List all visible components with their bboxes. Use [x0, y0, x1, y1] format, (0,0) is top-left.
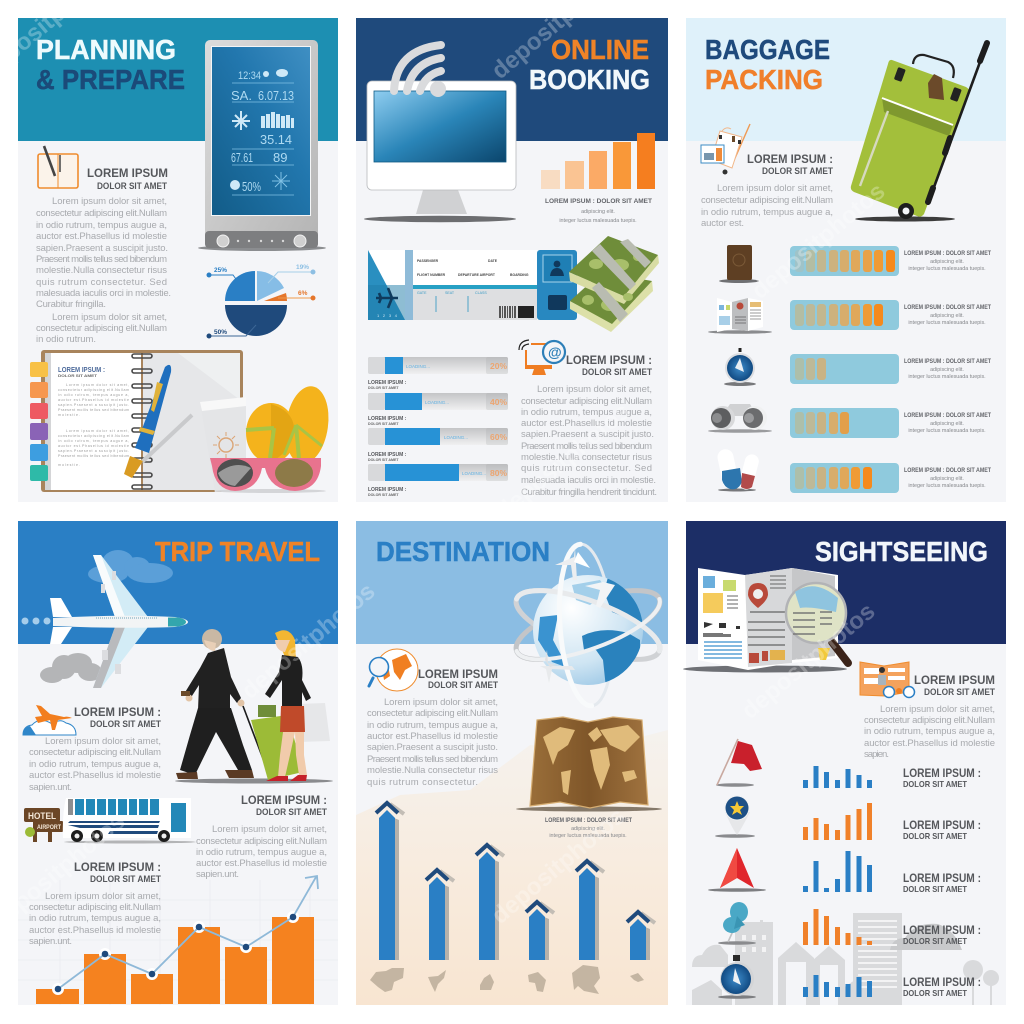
pie chart	[206, 264, 316, 338]
row: compass: LOREM IPSUM : DOLOR SIT AMET	[904, 358, 991, 365]
subheading: DOLOR SIT AMET	[924, 687, 995, 697]
caption: adipiscing elit.	[571, 826, 605, 832]
row: binoculars	[708, 404, 991, 438]
title: trip travel: TRIP TRAVEL	[155, 536, 320, 567]
spiral notebook: auctor est.Phasellus id molestie	[58, 444, 129, 448]
row: map: integer luctus malesuada tuepis.	[908, 320, 986, 326]
title: online booking: BOOKING	[529, 64, 650, 95]
caption: LOREM IPSUM : DOLOR SIT AMET	[545, 198, 652, 205]
spiral notebook: Praesent mollis tellus sed bibendum	[58, 454, 129, 458]
row: star pin: LOREM IPSUM :	[903, 820, 981, 832]
clouds	[40, 550, 173, 683]
hotel and airport sign	[24, 808, 63, 842]
body text: Lorem ipsum dolor sit amet,	[45, 736, 161, 747]
body text: in odio rutrum, tempus augue a,	[29, 913, 161, 924]
watermark	[0, 0, 891, 935]
body text: malesuada iaculis orci in molestie.	[36, 288, 171, 299]
body text: auctor est.Phasellus id molestie	[196, 858, 327, 869]
folded guide map	[683, 568, 847, 672]
body text: sapien.Praesent a suscipit justo.	[521, 429, 654, 440]
loading bar 80 percent: 80%	[490, 468, 507, 478]
body text: auctor est.Phasellus id molestie	[864, 738, 995, 749]
panel: destination	[356, 521, 668, 1005]
spiral notebook: molestie.	[58, 463, 80, 467]
loading bar 20 percent: LOREM IPSUM :	[368, 380, 407, 386]
orange bar chart	[541, 133, 655, 189]
body text: auctor est.Phasellus id molestie	[29, 770, 161, 781]
body text: consectetur adipiscing elit.Nullam	[29, 747, 161, 758]
spiral notebook: molestie.	[58, 413, 80, 417]
weather station device: 67.61	[231, 150, 253, 165]
body text: in odio rutrum, tempus augue a,	[521, 407, 652, 418]
body text: consectetur adipiscing elit.Nullam	[864, 715, 995, 726]
weather station device: 89	[273, 150, 287, 165]
arrow bar 2	[426, 870, 454, 960]
subheading: DOLOR SIT AMET	[90, 719, 161, 729]
caption: adipiscing elit.	[581, 209, 615, 215]
body text: in odio rutrum.	[36, 334, 96, 345]
arrow bar chart	[376, 803, 655, 960]
caption: integer luctus malesuada tuepis.	[559, 218, 637, 224]
body text	[367, 697, 498, 788]
title: planning and prepare: PLANNING	[36, 34, 176, 65]
panel: planning and prepare	[18, 18, 338, 502]
pie chart: 6%	[298, 290, 308, 297]
subheading	[747, 152, 833, 176]
body text	[196, 824, 327, 880]
body text: auctor est.	[701, 218, 744, 229]
icon: monitor with at sign	[519, 340, 565, 375]
body text: Lorem ipsum dolor sit amet,	[52, 312, 167, 323]
subheading: LOREM IPSUM	[87, 166, 168, 180]
magnifying glass	[786, 583, 848, 663]
green suitcase	[851, 43, 987, 222]
icon: luggage and calendar	[701, 124, 750, 174]
row: star pin: DOLOR SIT AMET	[903, 831, 968, 841]
body text: consectetur adipiscing elit.Nullam	[196, 836, 327, 847]
row: red flag: LOREM IPSUM :	[903, 768, 981, 780]
subheading: LOREM IPSUM :	[74, 860, 161, 874]
loading bar 40 percent: 40%	[490, 397, 507, 407]
subheading	[418, 667, 498, 690]
subheading: LOREM IPSUM :	[74, 705, 161, 719]
loading bar 60 percent	[368, 428, 508, 462]
subheading	[566, 353, 652, 377]
subheading: LOREM IPSUM :	[241, 793, 327, 807]
body text: sapien.	[864, 749, 889, 760]
caption	[545, 198, 652, 224]
subheading: LOREM IPSUM :	[747, 152, 833, 166]
body text: Praesent mollis tellus sed bibendum	[36, 254, 167, 265]
spiral notebook: consectetur adipiscing elit.Nullam	[58, 434, 129, 438]
spiral notebook: sapien.Praesent a suscipit justo.	[58, 403, 129, 407]
caption: integer luctus malesuada tuepis.	[549, 833, 627, 839]
row: compass: LOREM IPSUM :	[903, 977, 981, 989]
body text	[36, 196, 171, 345]
weather station device: 35.14	[260, 132, 292, 147]
watermark: depositphotos	[487, 803, 631, 930]
icon: world with magnifier	[369, 649, 418, 691]
caption	[545, 817, 632, 839]
boarding pass: BOARDING	[510, 273, 529, 277]
spiral notebook: in odio rutrum, tempus augue a,	[58, 393, 129, 397]
body text: in odio rutrum, tempus augue a,	[196, 847, 327, 858]
loading bar 80 percent	[368, 464, 508, 497]
body text: Lorem ipsum dolor sit amet,	[384, 697, 498, 708]
loading bars	[368, 357, 508, 497]
row: compass	[724, 348, 991, 386]
boarding pass: DATE	[488, 259, 498, 263]
title: online booking	[529, 34, 650, 95]
body text: sapien.Praesent a suscipit justo.	[367, 742, 498, 753]
icon: orange guide map	[860, 662, 914, 698]
spiral notebook: DOLOR SIT AMET	[58, 374, 98, 378]
flip flops	[246, 383, 333, 470]
row: compass: DOLOR SIT AMET	[903, 988, 968, 998]
title: destination: DESTINATION	[376, 536, 550, 567]
spiral notebook: in odio rutrum, tempus augue a,	[58, 439, 129, 443]
row: medicine capsules: integer luctus malesuada tuepis.	[908, 483, 986, 489]
body text: sapien.unt.	[29, 782, 72, 793]
body text: sapien.Praesent a suscipit justo.	[36, 243, 168, 254]
row: map: adipiscing elit.	[930, 313, 964, 319]
icon: wifi signal	[394, 45, 442, 93]
weather station device: 50%	[242, 179, 261, 194]
body text: consectetur adipiscing elit.Nullam	[36, 208, 167, 219]
row: compass	[718, 955, 981, 999]
row: passport: adipiscing elit.	[930, 259, 964, 265]
watermark: depositphotos	[492, 398, 636, 525]
body text: consectetur adipiscing elit.Nullam	[36, 323, 167, 334]
arrow bar 4	[526, 902, 554, 960]
airplane	[22, 555, 188, 688]
subheading: DOLOR SIT AMET	[762, 166, 833, 176]
icon: monitor with at sign: @	[548, 344, 562, 360]
body text: consectetur adipiscing elit.Nullam	[367, 708, 498, 719]
panel: trip travel	[18, 521, 338, 1005]
title: sightseeing: SIGHTSEEING	[815, 536, 988, 567]
city skyline	[692, 913, 999, 1005]
row: push pin: DOLOR SIT AMET	[903, 936, 968, 946]
weather station device: 6.07.13	[258, 88, 294, 103]
watermark: depositphotos	[737, 598, 881, 725]
body text: quis rutrum consectetur. Sed	[521, 463, 652, 474]
panel: online booking	[356, 18, 668, 502]
subheading: DOLOR SIT AMET	[256, 807, 327, 817]
body text: malesuada iaculis orci in molestie.	[521, 475, 656, 486]
travelling woman	[251, 630, 330, 781]
pie chart: 25%	[214, 267, 227, 274]
row: red flag: DOLOR SIT AMET	[903, 779, 968, 789]
globe with orbiting planes	[508, 542, 668, 708]
sunscreen tube	[200, 397, 246, 492]
weather station device: SA.	[231, 88, 252, 103]
row: binoculars: LOREM IPSUM : DOLOR SIT AMET	[904, 412, 991, 419]
body text: molestie.Nulla consectetur risus	[367, 765, 498, 776]
body text	[864, 704, 995, 760]
row: binoculars: integer luctus malesuada tuepis.	[908, 428, 986, 434]
row: red navigation arrow	[708, 848, 981, 894]
loading bar 20 percent	[368, 357, 508, 390]
title: planning and prepare	[36, 34, 185, 95]
spiral notebook: Lorem ipsum dolor sit amet,	[66, 429, 129, 433]
subheading: LOREM IPSUM :	[566, 353, 652, 367]
loading bar 60 percent: LOREM IPSUM :	[368, 452, 407, 458]
desktop monitor	[364, 81, 516, 222]
body text: Lorem ipsum dolor sit amet,	[717, 183, 833, 194]
boarding pass: DEPARTURE AIRPORT	[458, 273, 496, 277]
title: online booking: ONLINE	[551, 34, 649, 65]
boarding pass: GATE	[417, 291, 427, 295]
folded world map	[516, 717, 662, 812]
subheading: DOLOR SIT AMET	[90, 874, 161, 884]
body text: Curabitur fringilla hendrerit tincidunt.	[521, 487, 657, 498]
title: baggage packing: PACKING	[705, 64, 823, 95]
subheading: LOREM IPSUM	[418, 667, 498, 681]
loading bar 20 percent: 20%	[490, 361, 507, 371]
row: passport: integer luctus malesuada tuepis.	[908, 266, 986, 272]
row: map: LOREM IPSUM : DOLOR SIT AMET	[904, 304, 991, 311]
loading bar 40 percent: LOREM IPSUM :	[368, 416, 407, 422]
boarding pass: SEAT	[445, 291, 455, 295]
loading bar 40 percent	[368, 393, 508, 426]
subheading	[74, 860, 161, 884]
body text: auctor est.Phasellus id molestie	[29, 925, 161, 936]
body text	[29, 736, 161, 793]
body text: consectetur adipiscing elit.Nullam	[29, 902, 161, 913]
row: red navigation arrow: LOREM IPSUM :	[903, 873, 981, 885]
arrow bar 3	[476, 845, 504, 960]
body text: sapien.unt.	[196, 869, 239, 880]
body text: Praesent mollis tellus sed bibendum	[367, 754, 498, 765]
spiral notebook: consectetur adipiscing elit.Nullam	[58, 388, 129, 392]
body text: quis rutrum consectetur.	[367, 777, 478, 788]
body text: in odio rutrum, tempus augue a,	[367, 720, 498, 731]
weather station device: 12:34	[238, 70, 261, 82]
title: baggage packing: BAGGAGE	[705, 34, 830, 65]
loading bar 80 percent: LOADING...	[462, 471, 486, 476]
loading bar 60 percent: 60%	[490, 432, 507, 442]
row: medicine capsules: LOREM IPSUM : DOLOR SIT AMET	[904, 467, 991, 474]
body text	[701, 183, 833, 229]
hotel and airport sign: AIRPORT	[37, 825, 61, 831]
subheading	[87, 166, 168, 191]
spiral notebook: LOREM IPSUM :	[58, 365, 105, 374]
caption: LOREM IPSUM : DOLOR SIT AMET	[545, 817, 632, 824]
row: binoculars: adipiscing elit.	[930, 421, 964, 427]
body text: molestie.Nulla consectetur risus	[521, 452, 652, 463]
arrow bar 5	[576, 861, 604, 960]
pie chart: 19%	[296, 264, 309, 271]
subheading: DOLOR SIT AMET	[97, 181, 167, 191]
loading bar 80 percent: DOLOR SIT AMET	[368, 493, 399, 497]
bus	[63, 798, 196, 844]
subheading	[914, 673, 995, 697]
loading bar 40 percent: LOADING...	[425, 400, 449, 405]
body text	[29, 891, 161, 947]
panel: baggage packing	[686, 18, 1006, 502]
title: baggage packing	[705, 34, 830, 95]
row: star pin	[715, 796, 981, 841]
loading bar 80 percent: LOREM IPSUM :	[368, 487, 407, 493]
boarding pass: FLIGHT NUMBER	[417, 273, 446, 277]
arrow bar 1	[376, 803, 404, 960]
subheading	[74, 705, 161, 729]
loading bar 20 percent: LOADING...	[406, 364, 430, 369]
body text: Lorem ipsum dolor sit amet,	[52, 196, 167, 207]
pie chart: 50%	[214, 329, 227, 336]
body text: sapien.unt.	[29, 936, 72, 947]
body text: in odio rutrum, tempus augue a,	[701, 207, 833, 218]
boarding pass: PASSENGER	[417, 259, 439, 263]
sunglasses	[210, 458, 326, 493]
spiral notebook: auctor est.Phasellus id molestie	[58, 398, 129, 402]
arrow bar 6	[627, 912, 655, 960]
loading bar 60 percent: LOADING...	[444, 435, 468, 440]
body text: consectetur adipiscing elit.Nullam	[701, 195, 833, 206]
body text: Curabitur fringilla.	[36, 299, 106, 310]
icon: plane over clouds	[23, 705, 76, 735]
continent silhouettes	[370, 965, 644, 994]
row: medicine capsules: adipiscing elit.	[930, 476, 964, 482]
row: compass: integer luctus malesuada tuepis.	[908, 374, 986, 380]
watermark: depositphotos	[747, 178, 891, 305]
subheading: DOLOR SIT AMET	[582, 367, 652, 377]
watermark: depositphotos	[237, 578, 381, 705]
money stacks	[569, 236, 659, 332]
panel: sightseeing	[683, 521, 1006, 1005]
body text: Lorem ipsum dolor sit amet,	[537, 384, 652, 395]
row: passport	[719, 245, 991, 283]
row: red flag	[716, 739, 981, 789]
icon: open notebook and pen	[38, 146, 78, 188]
subheading	[241, 793, 327, 817]
boarding pass: CLASS	[475, 291, 487, 295]
loading bar 20 percent: DOLOR SIT AMET	[368, 386, 399, 390]
subheading: DOLOR SIT AMET	[428, 680, 498, 690]
body text: in odio rutrum, tempus augue a,	[29, 759, 161, 770]
body text: auctor est.Phasellus id molestie	[36, 231, 167, 242]
loading bar 60 percent: DOLOR SIT AMET	[368, 458, 399, 462]
body text: consectetur adipiscing elit.Nullam	[521, 396, 652, 407]
bar and line chart	[36, 876, 318, 1004]
fountain pen	[124, 365, 192, 478]
body text	[521, 384, 657, 498]
row: red navigation arrow: DOLOR SIT AMET	[903, 884, 968, 894]
hotel and airport sign: HOTEL	[28, 811, 56, 821]
spiral notebook: sapien.Praesent a suscipit justo.	[58, 449, 129, 453]
spiral notebook	[30, 350, 243, 492]
boarding pass	[368, 250, 577, 320]
row: medicine capsules	[716, 448, 991, 493]
title: planning and prepare: & PREPARE	[36, 64, 185, 95]
subheading: LOREM IPSUM	[914, 673, 995, 687]
body text: Lorem ipsum dolor sit amet,	[45, 891, 161, 902]
body text: auctor est.Phasellus id molestie	[521, 418, 652, 429]
row: push pin	[718, 902, 981, 946]
row: passport: LOREM IPSUM : DOLOR SIT AMET	[904, 250, 991, 257]
weather station device	[198, 40, 326, 251]
travelling man	[175, 629, 333, 784]
row: map	[708, 298, 991, 334]
body text: molestie.Nulla consectetur risus	[36, 265, 167, 276]
boarding pass: 1 2 3 4	[377, 313, 398, 318]
body text: Lorem ipsum dolor sit amet,	[212, 824, 327, 835]
spiral notebook: Praesent mollis tellus sed bibendum	[58, 408, 129, 412]
body text: in odio rutrum, tempus augue a,	[36, 220, 167, 231]
body text: in odio rutrum, tempus augue a,	[864, 726, 995, 737]
row: compass: adipiscing elit.	[930, 367, 964, 373]
body text: Lorem ipsum dolor sit amet,	[880, 704, 995, 715]
loading bar 40 percent: DOLOR SIT AMET	[368, 422, 399, 426]
spiral notebook: Lorem ipsum dolor sit amet,	[66, 383, 129, 387]
body text: Praesent mollis tellus sed bibendum	[521, 441, 652, 452]
body text: quis rutrum consectetur. Sed	[36, 277, 167, 288]
body text: auctor est.Phasellus id molestie	[367, 731, 498, 742]
row: push pin: LOREM IPSUM :	[903, 925, 981, 937]
